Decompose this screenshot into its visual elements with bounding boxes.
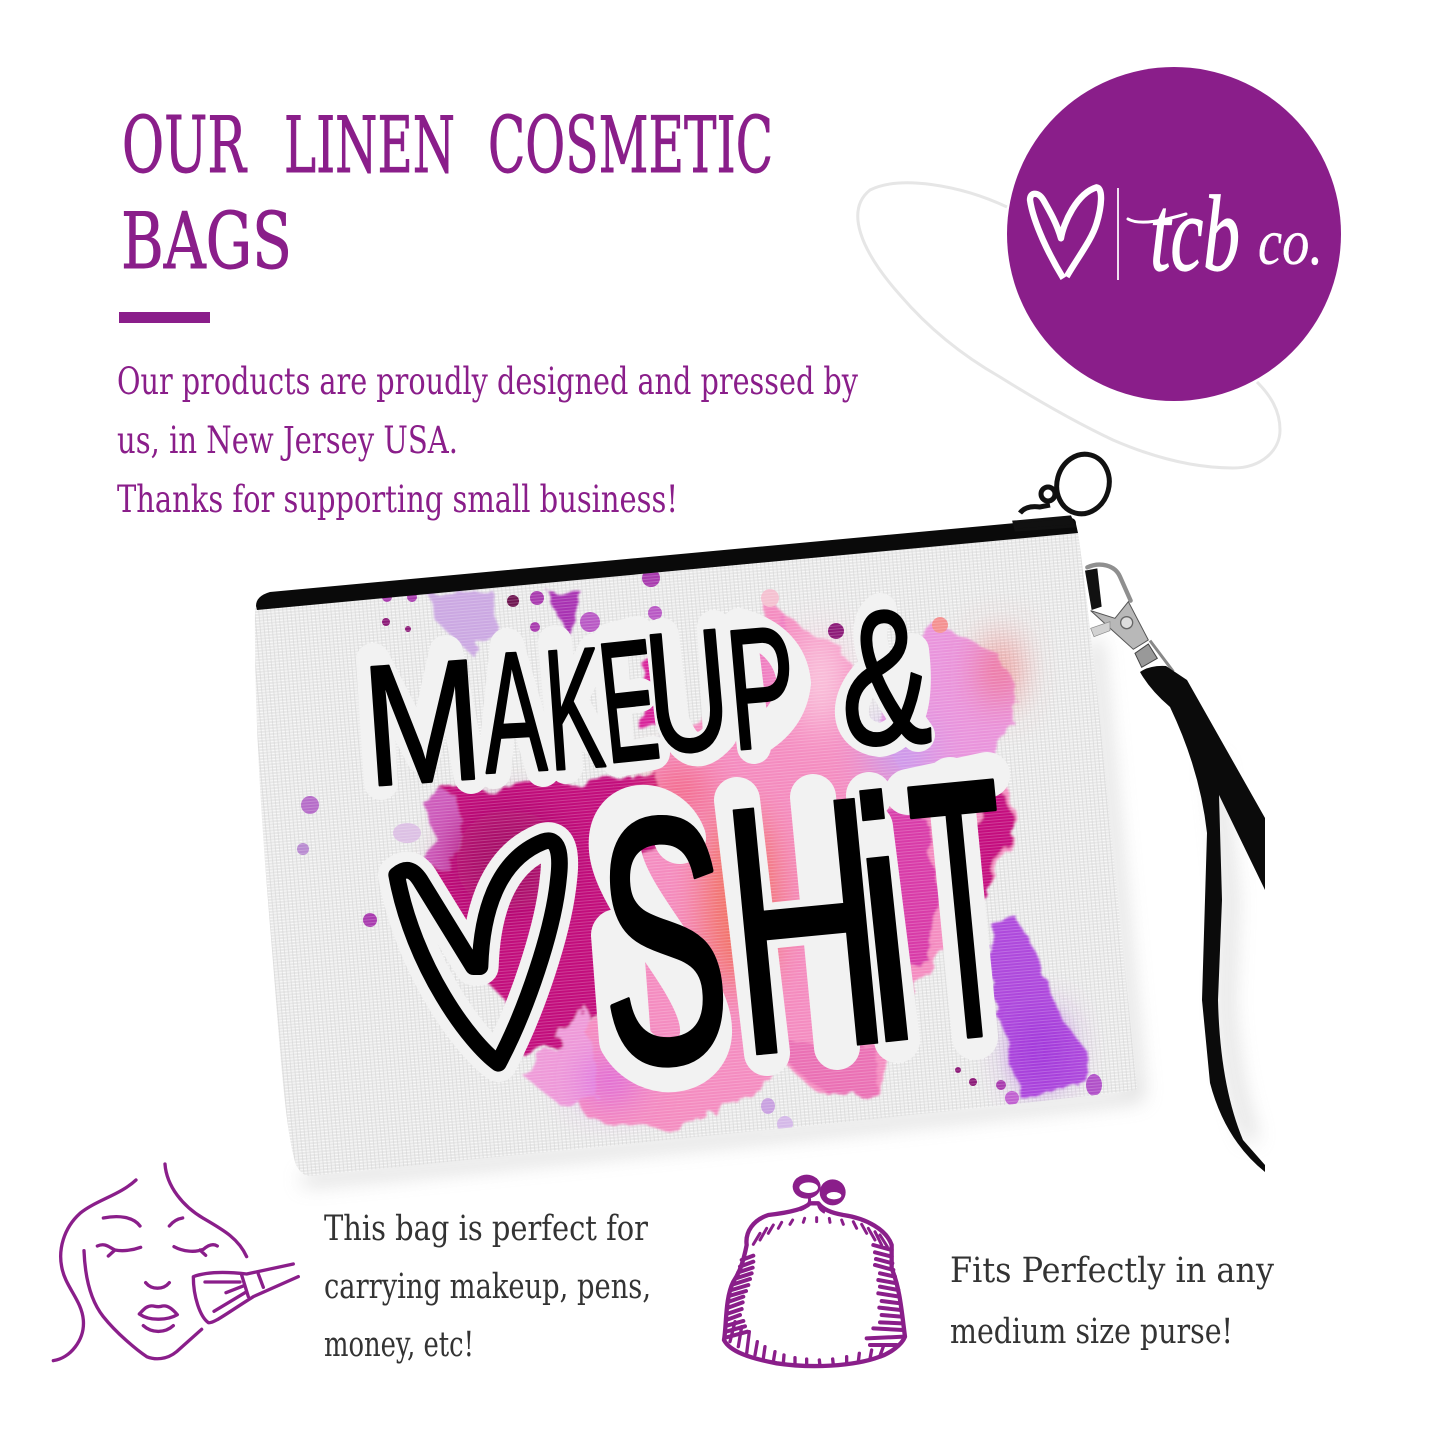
title: COSMETIC [488, 101, 773, 191]
slogan line two: Shit: S [589, 743, 738, 1140]
feature text: carrying makeup [324, 1209, 651, 1365]
title [121, 101, 773, 287]
logo divider line [1117, 188, 1119, 280]
icon: face with makeup brush [53, 1164, 298, 1361]
slogan line two: Shit: i [837, 725, 931, 1117]
linen weave overlay [297, 572, 1102, 1132]
bag body [255, 532, 1137, 1176]
title: OUR [122, 101, 247, 191]
intro text block: us, in New Jersey USA. [117, 419, 458, 462]
title: LINEN [284, 101, 455, 191]
title: BAGS [121, 197, 292, 287]
bag slogan [357, 568, 1028, 1140]
feature text: carrying makeup: carrying makeup, pens, [324, 1267, 651, 1307]
logo badge [1007, 67, 1341, 401]
slogan line one: Makeup & [357, 568, 934, 823]
logo wordmark: tcb [1150, 175, 1240, 294]
title divider [119, 312, 210, 323]
feature text: carrying makeup: This bag is perfect for [324, 1209, 648, 1249]
zipper [256, 518, 1078, 610]
logo heart [1030, 187, 1101, 278]
feature text: carrying makeup: money, etc! [324, 1325, 474, 1365]
slogan line one: Makeup &: & [837, 568, 934, 786]
watercolor splash [297, 572, 1102, 1134]
swivel clasp [1085, 565, 1173, 672]
heart outline [397, 841, 559, 1063]
slogan line one: Makeup &: M [357, 623, 488, 823]
feature text: fits in purse: Fits Perfectly in any [950, 1251, 1274, 1291]
purse hatching [725, 1218, 904, 1366]
decorative orbit ring [858, 183, 1280, 468]
wrist strap [1140, 666, 1265, 1172]
bag and strap shadows [303, 640, 1252, 1180]
slogan line one: Makeup &: K [539, 611, 609, 807]
slogan white halo [373, 610, 987, 1066]
slogan line one: Makeup &: P [719, 590, 804, 787]
intro text block: Our products are proudly designed and pressed by [117, 360, 858, 403]
feature text: fits in purse [950, 1251, 1274, 1352]
zipper pull and ring [1014, 448, 1116, 530]
slogan line one: Makeup &: U [638, 592, 737, 791]
slogan line one: Makeup &: E [591, 603, 667, 800]
purse clasp knobs [793, 1175, 821, 1199]
intro text block: Thanks for supporting small business! [117, 478, 678, 521]
slogan line two: Shit [589, 702, 1028, 1140]
slogan line one: Makeup &: A [478, 615, 550, 810]
intro text block [117, 360, 858, 521]
logo wordmark: co. [1258, 206, 1323, 279]
cosmetic bag [240, 448, 1265, 1190]
icon: coin purse [724, 1175, 905, 1366]
cosmetic bag: T [897, 702, 1028, 1118]
splatter dots [297, 569, 1102, 1132]
feature text: fits in purse: medium size purse! [950, 1312, 1233, 1352]
watercolor colour washes [455, 630, 1060, 1096]
slogan line two: Shit: H [708, 721, 903, 1132]
